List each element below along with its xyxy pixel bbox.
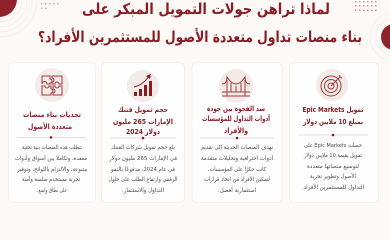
decoration: top-right dots [355, 1, 376, 11]
divider [17, 136, 86, 139]
body text: الأصول وتطوير تجربة [310, 172, 356, 180]
body text: تجربة مستخدم سلسة وآمنة [22, 176, 80, 183]
icon: puzzle [35, 68, 69, 102]
body text [302, 143, 364, 191]
panel: platform challenges [8, 62, 96, 202]
body text: تمويل بقيمة 10 ملايين دولار [303, 153, 362, 159]
body text: التداول والاستثمار. [122, 188, 164, 194]
heading: تحديات بناء منصات [23, 110, 81, 119]
decoration: top-left dots [41, 3, 58, 9]
body text: تتطلب هذه المنصات بنية تحتية [22, 145, 82, 151]
heading [302, 105, 364, 126]
body text: متنوعة، والالتزام باللوائح، وتوفير [16, 167, 87, 173]
panel: fintech funding [102, 62, 184, 202]
body text: في عام 2024، مدفوعًا بالنمو [110, 166, 175, 173]
body text [201, 145, 273, 194]
body text: تهدف المنصات الحديثة إلى تقديم [201, 145, 273, 151]
body text: الرقمي وارتفاع الطلب على حلول [108, 177, 178, 183]
heading: بمبلغ 10 ملايين دولار [302, 117, 363, 126]
heading [202, 104, 270, 135]
heading: تمويل Epic Markets [302, 105, 364, 114]
heading: والأفراد [224, 126, 248, 135]
body text: في الإمارات 265 مليون دولار [108, 156, 177, 162]
heading: دولار 2024 [126, 127, 160, 136]
body text: التداول للمستثمرين الأفراد. [302, 183, 364, 191]
divider [110, 137, 176, 139]
panel: Epic Markets funding [290, 62, 378, 202]
body text: حصلت Epic Markets على [304, 143, 362, 149]
panel: closing the gap [192, 62, 282, 202]
body text: معقدة، وتكاملا بين أسواق وأدوات [15, 154, 87, 162]
icon: growth chart [127, 70, 159, 102]
body text: على نطاق واسع. [37, 188, 67, 194]
decoration: right circle [381, 24, 390, 50]
body text: استثمارية أفضل. [218, 186, 256, 194]
heading: أدوات التداول للمؤسسات [202, 114, 270, 123]
divider [299, 134, 368, 136]
decoration: top-left circle [0, 0, 17, 17]
icon: bridge [219, 69, 253, 103]
title [38, 0, 362, 46]
body text: لتوسيع منصاتها متعددة [307, 164, 359, 170]
body text [15, 145, 87, 194]
divider [200, 137, 274, 139]
body text: بلغ حجم تمويل شركات الفنتك [111, 144, 175, 151]
body text: لتمكين الأفراد من اتخاذ قرارات [204, 175, 270, 183]
icon: target [316, 69, 348, 101]
heading [113, 105, 173, 136]
heading: حجم تمويل فنتك [118, 105, 168, 114]
heading: الإمارات 265 مليون [113, 117, 173, 126]
heading [23, 110, 81, 131]
title: لماذا تراهن جولات التمويل المبكر على [82, 0, 330, 18]
body text: أدوات احترافية وتحليلات متقدمة [201, 154, 273, 162]
heading: متعددة الأصول [28, 122, 72, 131]
body text [108, 144, 178, 194]
body text: كانت حكرًا على المؤسسات، [208, 166, 266, 173]
heading: سد الفجوة بين جودة [207, 104, 265, 113]
